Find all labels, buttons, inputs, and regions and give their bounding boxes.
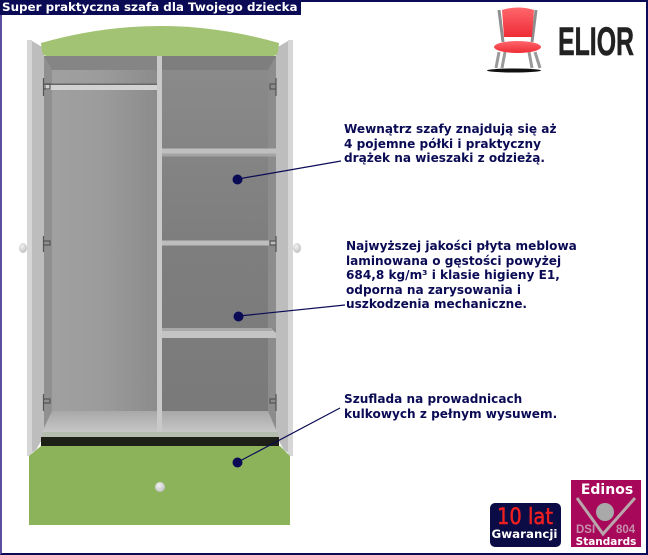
text: interior note: Wewnątrz szafy znajdują się aż xyxy=(344,122,556,136)
cabinet interior xyxy=(42,56,278,437)
badge: Edinos standards: 804 xyxy=(616,524,636,536)
centre divider xyxy=(157,56,162,432)
badge: Edinos standards: Standards xyxy=(576,536,636,548)
callout line: shelves xyxy=(232,161,341,184)
logo: red chair xyxy=(487,8,541,72)
badge: Edinos standards: Edinos xyxy=(581,482,633,498)
text: board note: odporna na zarysowania i xyxy=(346,282,521,296)
badge: 10 lat guarantee: 10 lat xyxy=(497,505,553,530)
text: drawer note: Szuflada na prowadnicach xyxy=(344,392,522,406)
title banner: Super praktyczna szafa dla Twojego dziecka xyxy=(2,0,298,14)
text: board note: uszkodzenia mechaniczne. xyxy=(346,297,527,311)
hinges xyxy=(44,78,276,411)
drawer gap xyxy=(41,437,279,446)
drawer knob xyxy=(155,482,165,492)
text: board note: Najwyższej jakości płyta meblowa xyxy=(346,239,577,253)
text: interior note: drążek na wieszaki z odzieżą. xyxy=(344,151,545,165)
clothes rail xyxy=(46,84,157,90)
badge: Edinos standards: DSI xyxy=(576,524,595,536)
right door xyxy=(276,40,293,456)
badge: 10 lat guarantee: Gwarancji xyxy=(492,527,558,541)
text: board note: 684,8 kg/m³ i klasie higieny E1, xyxy=(346,268,560,282)
callout line: drawer xyxy=(232,408,340,468)
text: interior note xyxy=(344,122,556,165)
drawer xyxy=(29,446,290,525)
text: drawer note xyxy=(344,392,557,420)
text: drawer note: kulkowych z pełnym wysuwem. xyxy=(344,406,557,420)
text: board note xyxy=(346,239,577,311)
callout line: board xyxy=(234,305,345,322)
green top arch xyxy=(41,26,279,56)
door knobs xyxy=(19,243,301,253)
text: interior note: 4 pojemne półki i praktyczny xyxy=(344,136,541,150)
badge: 10 lat guarantee xyxy=(490,503,561,547)
shelves xyxy=(162,148,276,338)
text: board note: laminowana o gęstości powyżej xyxy=(346,254,561,268)
badge: Edinos standards xyxy=(571,480,641,548)
left door xyxy=(27,40,44,456)
